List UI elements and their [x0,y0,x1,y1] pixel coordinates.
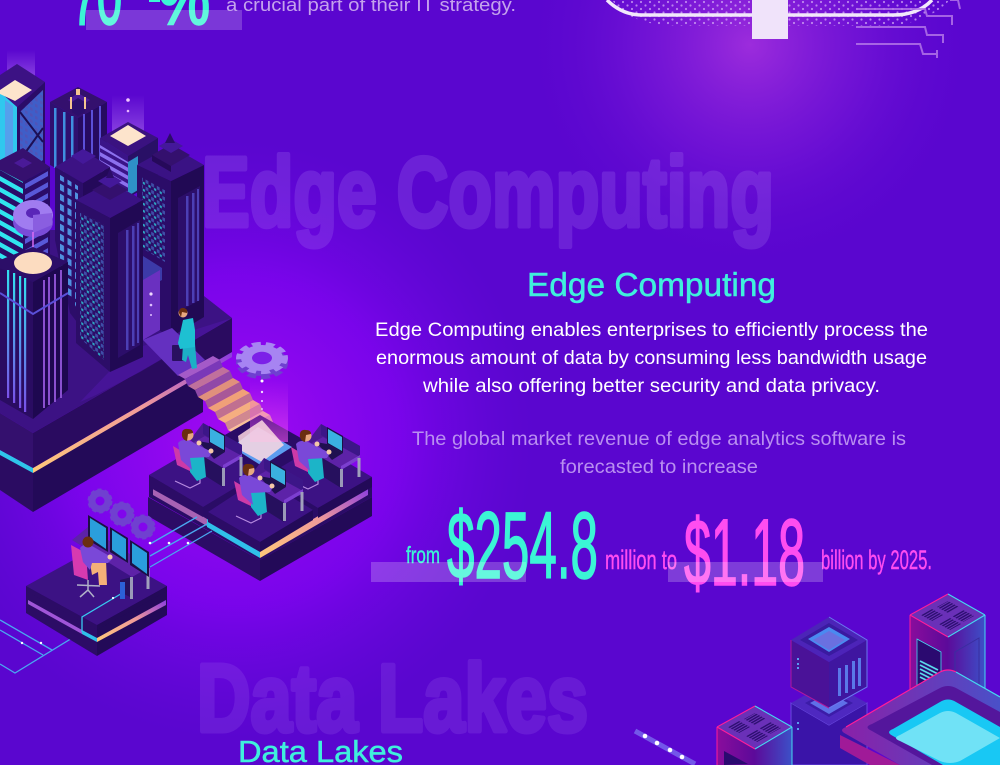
lower platform [148,415,372,581]
monitors [88,515,149,577]
doorway with light [143,256,162,340]
illustration: city on isometric platform [0,50,273,512]
billion by 2025 label: billion by 2025. [821,545,932,575]
platform [0,230,232,512]
value: 1.18 billion: $1.18 [684,500,805,606]
businessman with briefcase [172,308,197,369]
market forecast text [412,428,906,478]
tower B [50,87,107,180]
description paragraph: while also offering better security and data privacy. [422,375,880,397]
floating gear above desks [239,344,285,377]
small platform with operator [26,515,167,656]
from label: from [406,542,440,568]
glowing dotted line [635,731,695,764]
ghost heading: Data Lakes: Data Lakes [197,645,588,752]
forecast figures [371,493,932,606]
light beam with particles [250,380,288,442]
lower cube [791,682,867,765]
link nodes [21,542,189,644]
small gears [89,490,154,538]
highlight bar right [668,562,823,582]
tower G [0,148,50,272]
server front left [717,706,792,765]
main tray [840,670,1000,765]
operator [71,536,113,597]
cloud base graphic [607,0,950,39]
tower F [76,168,143,372]
left tile [149,423,258,517]
tower C [100,95,158,198]
ghost heading: Edge Computing: Edge Computing [202,137,774,247]
description paragraph: enormous amount of data by consuming less bandwidth usage [376,347,927,369]
top statistic: percentage [72,0,242,41]
section heading: Edge Computing: Edge Computing [527,266,776,303]
front tile [208,458,313,552]
circuit lines [856,0,960,58]
tower H with round top [0,247,68,419]
desk cluster on large platform [148,380,372,581]
floor glow [238,420,284,462]
market forecast text: forecasted to increase [560,456,758,478]
illustration: server cluster [635,594,1000,765]
million to label: million to [605,545,677,575]
market forecast text: The global market revenue of edge analytics software is [412,428,906,450]
rear light pool [232,427,292,466]
server rear right [910,594,985,700]
walkway [143,328,205,376]
highlight bar left [371,562,526,582]
tower A [0,50,45,190]
description paragraph [375,319,928,397]
data link lines [0,517,212,673]
link on platform [82,592,124,632]
platform base [26,547,167,656]
floating ring icon [13,200,53,254]
tower D [137,133,204,337]
tower E [55,149,110,345]
right tile [266,424,372,518]
value: 254.8 million: $254.8 [447,493,598,599]
description paragraph: Edge Computing enables enterprises to efficiently process the [375,319,928,341]
upper cube [791,617,867,708]
operator desk [72,527,150,599]
stairs [178,356,273,441]
